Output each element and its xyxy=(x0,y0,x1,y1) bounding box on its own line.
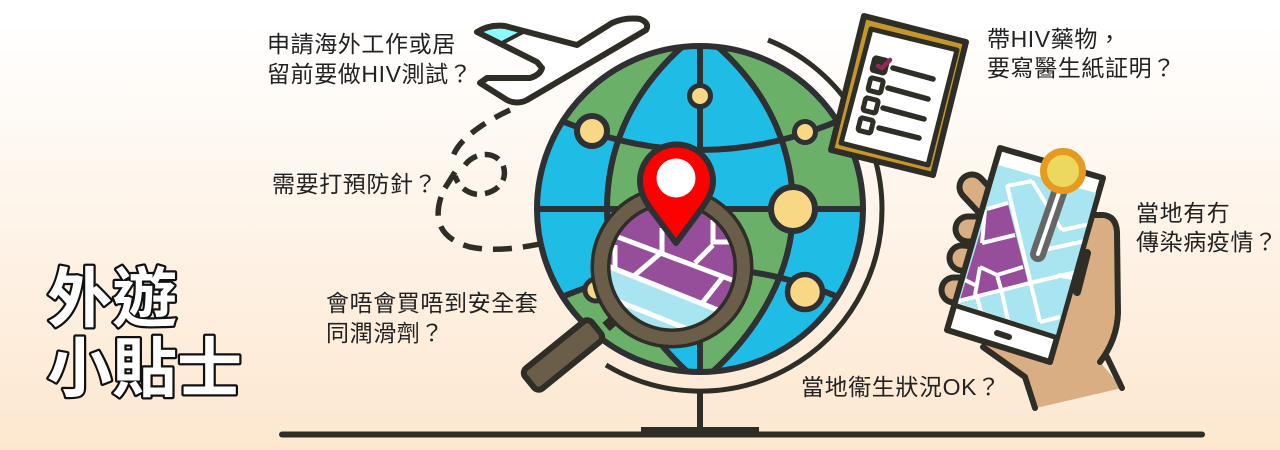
phone button xyxy=(997,333,1009,337)
magnifying glass xyxy=(521,196,744,392)
globe nodes xyxy=(577,86,822,310)
text: condoms and lubricant xyxy=(326,290,538,346)
fingers xyxy=(954,187,1000,290)
text: HIV medication certificate: 帶HIV藥物， xyxy=(987,26,1122,52)
dashed flight path xyxy=(438,110,545,249)
hand holding phone xyxy=(954,187,1122,408)
text: work or residence abroad: 申請海外工作或居 xyxy=(267,31,456,57)
globe xyxy=(534,43,866,375)
text: local epidemics: 傳染病疫情？ xyxy=(1136,229,1278,255)
magnifier ring xyxy=(600,196,744,338)
title: 外遊 xyxy=(47,262,177,335)
text: local epidemics: 當地有冇 xyxy=(1136,200,1230,226)
text: local hygiene: 當地衞生狀況OK？ xyxy=(801,374,1001,400)
title: 小貼士 xyxy=(47,332,242,405)
phone map screen xyxy=(958,165,1096,335)
location pin xyxy=(640,144,713,243)
text: HIV medication certificate xyxy=(987,26,1176,81)
text: condoms and lubricant: 會唔會買唔到安全套 xyxy=(326,290,538,316)
smartphone xyxy=(947,148,1103,362)
airplane xyxy=(477,18,647,102)
magnifier lens map xyxy=(610,210,734,328)
map pin xyxy=(1038,152,1082,254)
text: work or residence abroad xyxy=(267,31,472,87)
checklist clipboard xyxy=(831,16,966,175)
globe stand xyxy=(606,40,882,435)
text: vaccination: 需要打預防針？ xyxy=(272,171,437,197)
palm xyxy=(983,215,1122,408)
text: HIV medication certificate: 要寫醫生紙証明？ xyxy=(987,55,1176,81)
ground line xyxy=(282,432,1202,438)
title xyxy=(47,262,242,405)
text: condoms and lubricant: 同潤滑劑？ xyxy=(326,320,444,346)
text: work or residence abroad: 留前要做HIV測試？ xyxy=(267,61,472,87)
text: local epidemics xyxy=(1136,200,1278,255)
checkbox rows xyxy=(858,58,933,138)
magnifier handle xyxy=(521,313,622,392)
